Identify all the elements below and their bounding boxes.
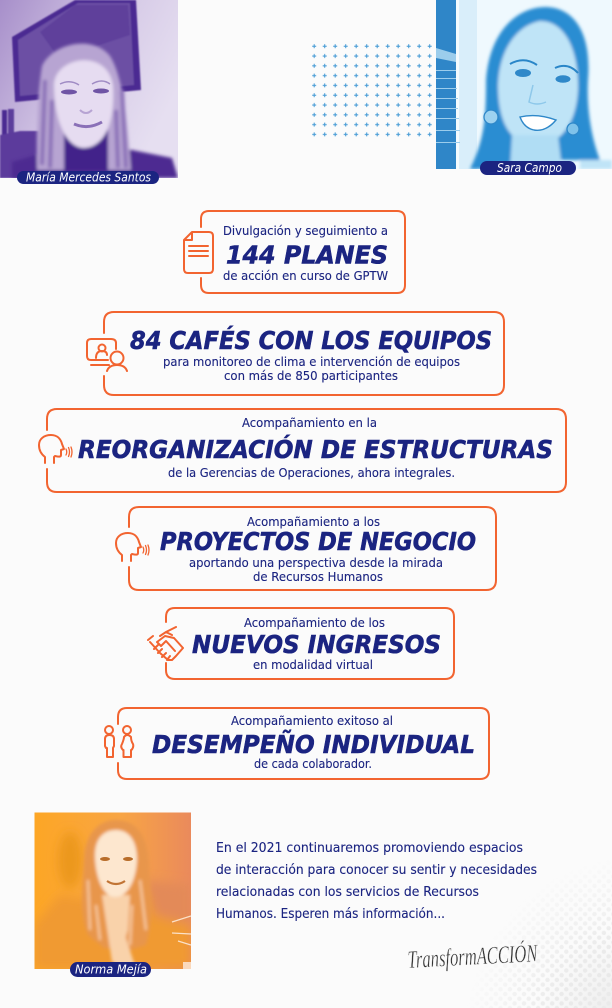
panel: 144 planes — [184, 211, 405, 293]
signature: TransformACCIÓN — [407, 939, 539, 974]
panel: reorganización de estructuras: de la Gerencias de Operaciones, ahora integrales. — [168, 465, 455, 480]
panel: 84 cafés con los equipos — [87, 312, 504, 395]
name tag: María Mercedes Santos: María Mercedes Santos — [26, 170, 151, 184]
panel: desempeño individual: de cada colaborador. — [254, 756, 372, 771]
icon: video call — [87, 339, 127, 371]
closing paragraph: En el 2021 continuaremos promoviendo espacios — [216, 840, 523, 856]
panel: desempeño individual — [105, 708, 489, 779]
halftone corner decoration — [508, 900, 612, 1008]
icon: speaking head — [116, 533, 141, 561]
name tag: Norma Mejía: Norma Mejía — [75, 962, 147, 976]
panel: desempeño individual: Acompañamiento exitoso al — [231, 713, 393, 728]
panel: nuevos ingresos: Acompañamiento de los — [244, 615, 385, 630]
closing paragraph: Humanos. Esperen más información... — [216, 906, 445, 922]
panel: proyectos de negocio: Acompañamiento a los — [247, 514, 380, 529]
panel: proyectos de negocio: aportando una perspectiva desde la mirada — [189, 555, 443, 570]
panel: proyectos de negocio: de Recursos Humanos — [253, 569, 383, 584]
panel: 84 cafés con los equipos: 84 CAFÉS CON LOS EQUIPOS — [130, 326, 492, 355]
icon: document — [184, 232, 213, 273]
name tag: Sara Campo: Sara Campo — [497, 161, 562, 175]
closing paragraph — [216, 840, 537, 922]
panel: 84 cafés con los equipos: con más de 850 participantes — [224, 368, 398, 383]
dot grid decoration — [311, 43, 437, 141]
panel: nuevos ingresos: NUEVOS INGRESOS — [192, 630, 441, 659]
photo: Norma Mejía — [34, 812, 191, 969]
icon: two people — [105, 726, 133, 757]
panel: desempeño individual: DESEMPEÑO INDIVIDUAL — [152, 730, 475, 759]
icon: voice waves — [143, 545, 149, 555]
panel: proyectos de negocio — [116, 507, 496, 590]
panel: 84 cafés con los equipos: para monitoreo de clima e intervención de equipos — [163, 354, 460, 369]
photo: Sara Campo — [436, 0, 612, 169]
panel: reorganización de estructuras — [39, 409, 566, 492]
panel: 144 planes: 144 PLANES — [226, 240, 388, 270]
icon: voice waves — [66, 447, 72, 457]
panel: proyectos de negocio: PROYECTOS DE NEGOCIO — [160, 527, 476, 556]
closing paragraph: relacionadas con los servicios de Recursos — [216, 884, 479, 900]
panel: nuevos ingresos: en modalidad virtual — [253, 657, 373, 672]
panel: reorganización de estructuras: Acompañamiento en la — [242, 415, 377, 430]
panel: reorganización de estructuras: REORGANIZACIÓN DE ESTRUCTURAS — [78, 434, 553, 464]
panel: nuevos ingresos — [148, 608, 454, 679]
icon: handshake — [148, 627, 183, 660]
closing paragraph: de interacción para conocer su sentir y necesidades — [216, 862, 537, 878]
icon: speaking head — [39, 435, 64, 463]
panel: 144 planes: de acción en curso de GPTW — [223, 268, 388, 283]
photo: María Mercedes Santos — [0, 0, 178, 178]
panel: 144 planes: Divulgación y seguimiento a — [223, 223, 388, 238]
